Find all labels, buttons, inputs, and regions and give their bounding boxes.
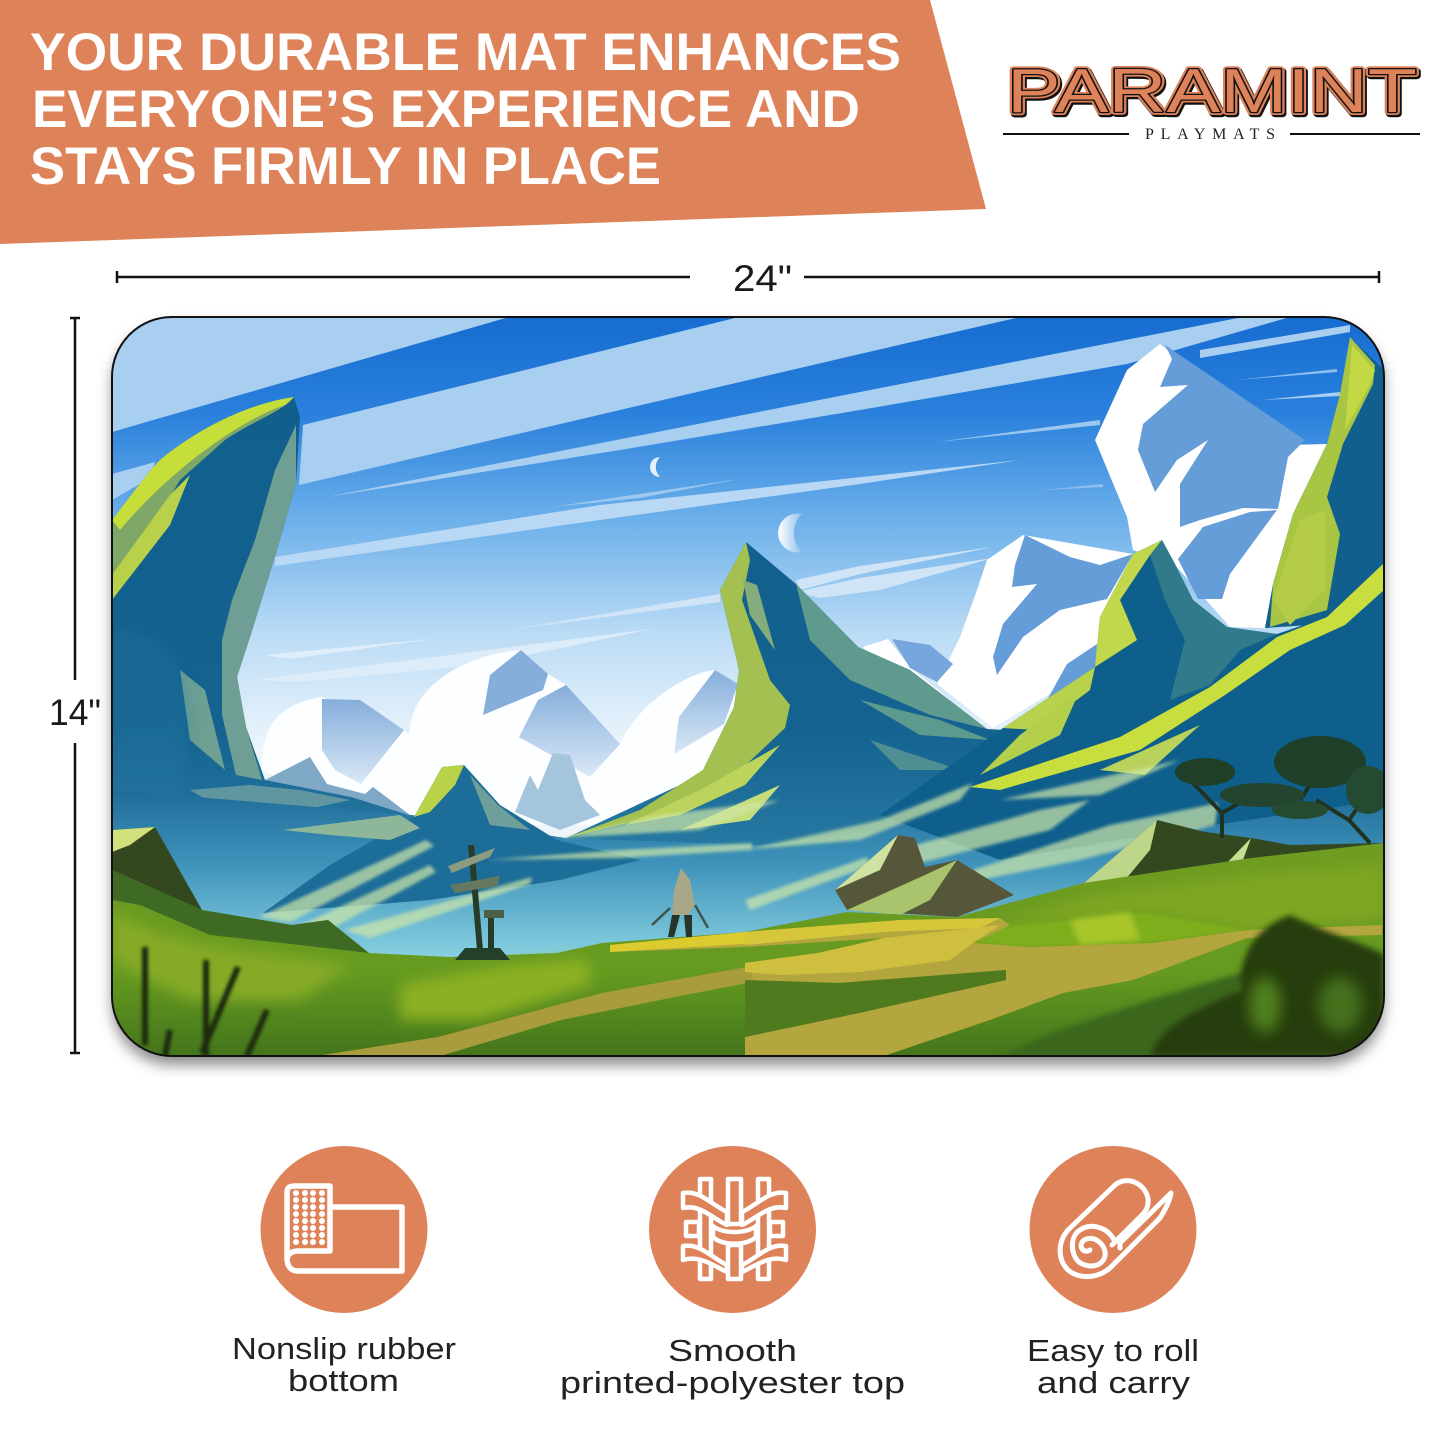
- label: nonslip rubber bottom: Nonslip rubber: [232, 1331, 456, 1366]
- label: smooth printed-polyester top: Smooth: [668, 1333, 797, 1368]
- yellow dirt path: [316, 918, 1382, 1056]
- icon: rubber mat corner: [260, 1146, 428, 1313]
- right rock column: [1265, 337, 1384, 628]
- feature: easy to roll and carry: [1027, 1146, 1199, 1400]
- feature: smooth polyester top: [560, 1146, 905, 1400]
- centre spire: [566, 542, 1037, 845]
- logo: Paramint Playmats: PARAMINT: [1008, 59, 1418, 128]
- dimension: height 14 inches: [49, 318, 101, 1053]
- warrior figure: [652, 868, 708, 937]
- title heading: YOUR DURABLE MAT ENHANCES: [30, 23, 901, 82]
- logo: Paramint Playmats: [1003, 57, 1420, 143]
- mid-left mountain: [263, 765, 640, 913]
- dimension: width 24 inches: 24": [733, 258, 792, 299]
- distant hills and rocks: [113, 820, 1383, 917]
- label: easy to roll and carry: and carry: [1037, 1365, 1191, 1400]
- meadow foreground: [112, 843, 1384, 1056]
- valley light streaks: [259, 760, 1218, 938]
- title heading: STAYS FIRMLY IN PLACE: [30, 137, 661, 196]
- sky: [113, 318, 1382, 838]
- signpost: [448, 845, 510, 960]
- icon: rolled mat: [1030, 1146, 1196, 1313]
- icon: woven fabric: [649, 1146, 816, 1313]
- logo: Paramint Playmats: PARAMINT: [1007, 57, 1417, 126]
- clouds and distant peaks: [262, 650, 738, 830]
- logo: Paramint Playmats: PARAMINT: [1007, 57, 1417, 126]
- label: nonslip rubber bottom: [232, 1331, 456, 1398]
- label: nonslip rubber bottom: bottom: [288, 1363, 399, 1398]
- label: easy to roll and carry: Easy to roll: [1027, 1333, 1199, 1368]
- moons: [650, 457, 802, 553]
- feature: nonslip rubber bottom: [232, 1146, 456, 1398]
- dimension: height 14 inches: 14": [49, 692, 101, 733]
- foreground dark plants: [145, 915, 1384, 1056]
- right mountain slope: [880, 540, 1384, 860]
- logo: Paramint Playmats: PLAYMATS: [1145, 126, 1275, 143]
- title heading: [30, 23, 901, 196]
- label: smooth printed-polyester top: printed-polyester top: [560, 1365, 905, 1400]
- label: smooth printed-polyester top: [560, 1333, 905, 1400]
- title heading: EVERYONE’S EXPERIENCE AND: [32, 80, 860, 139]
- title banner: [0, 0, 986, 244]
- logo: Paramint Playmats: PARAMINT: [1007, 57, 1417, 126]
- left monolith rock: [113, 397, 408, 815]
- valley haze: [113, 798, 1383, 957]
- tree: [1175, 736, 1390, 843]
- dimension: width 24 inches: [117, 258, 1379, 299]
- far snow mountains right: [863, 344, 1327, 728]
- playmat illustration: [112, 317, 1390, 1056]
- label: easy to roll and carry: [1027, 1333, 1199, 1400]
